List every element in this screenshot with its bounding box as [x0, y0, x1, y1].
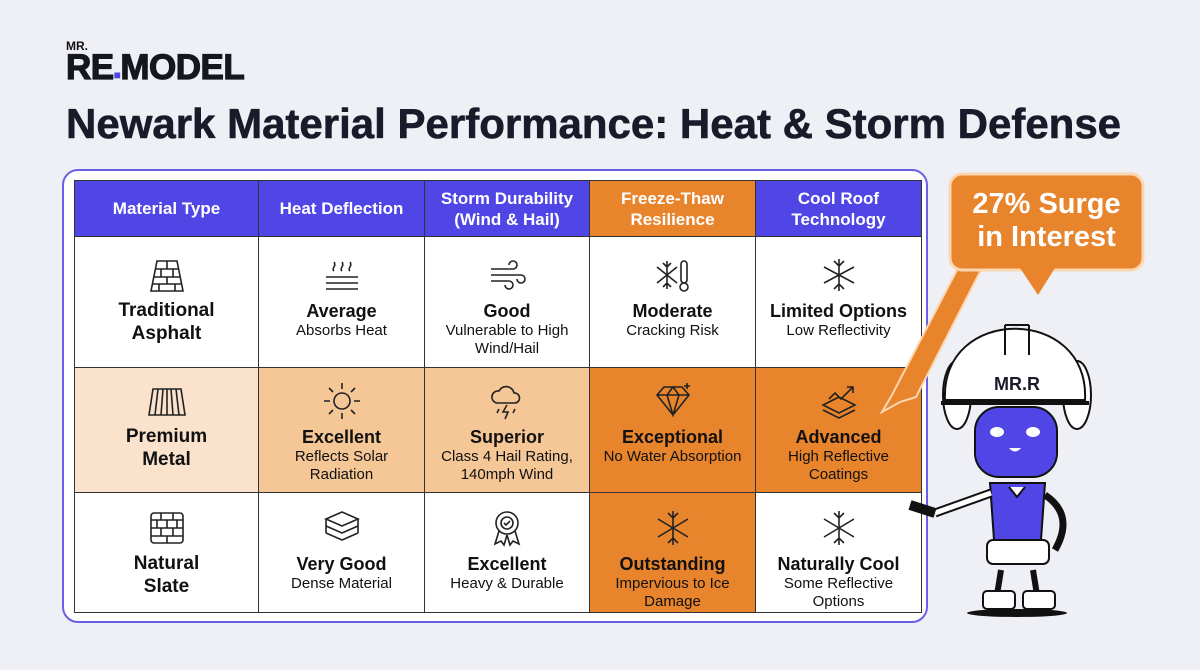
panel: comparison table: Reflects Solar: [295, 448, 388, 465]
panel: comparison table: Resilience: [630, 210, 715, 228]
panel: comparison table: Some Reflective: [784, 575, 893, 592]
panel: comparison table: No Water Absorption: [604, 448, 741, 465]
panel: comparison table: Damage: [644, 593, 701, 610]
title: Newark Material Performance: Heat & Storm Defense: [66, 100, 1121, 147]
panel: comparison table: Premium: [126, 426, 207, 447]
icon: robot mascot: [908, 324, 1092, 617]
callout: 27% surge: 27% Surge: [972, 188, 1121, 220]
panel: comparison table: Coatings: [809, 466, 868, 483]
panel: comparison table: Limited Options: [770, 301, 907, 321]
panel: comparison table: Excellent: [467, 554, 547, 574]
panel: comparison table: Freeze-Thaw: [621, 188, 724, 208]
panel: comparison table: Metal: [142, 449, 191, 470]
callout: 27% surge: in Interest: [977, 221, 1116, 253]
panel: comparison table: Average: [306, 301, 377, 321]
panel: comparison table: Technology: [791, 210, 886, 228]
panel: comparison table: High Reflective: [788, 448, 889, 465]
panel: comparison table: Impervious to Ice: [615, 575, 730, 592]
panel: comparison table: Class 4 Hail Rating,: [441, 448, 573, 465]
panel: comparison table: Good: [484, 301, 530, 321]
panel: comparison table: Heavy & Durable: [450, 575, 564, 592]
panel: comparison table: Natural: [134, 553, 199, 574]
icon: robot mascot: MR.R: [994, 374, 1040, 394]
panel: comparison table: Asphalt: [132, 323, 201, 344]
panel: comparison table: Wind/Hail: [475, 340, 539, 357]
panel: comparison table: Traditional: [118, 300, 215, 321]
logo: RE■MODEL: [66, 48, 244, 87]
panel: comparison table: Cool Roof: [798, 188, 879, 208]
panel: comparison table: Storm Durability: [441, 188, 573, 208]
panel: comparison table: 140mph Wind: [461, 466, 553, 483]
callout: 27% surge: [879, 172, 1144, 414]
panel: comparison table: Slate: [144, 576, 189, 597]
panel: comparison table: Heat Deflection: [280, 199, 403, 218]
panel: comparison table: Very Good: [296, 554, 387, 574]
panel: comparison table: Naturally Cool: [777, 554, 900, 574]
panel: comparison table: [62, 169, 928, 623]
panel: comparison table: Excellent: [302, 427, 381, 447]
panel: comparison table: Dense Material: [291, 575, 392, 592]
panel: comparison table: Moderate: [632, 301, 712, 321]
panel: comparison table: (Wind & Hail): [454, 210, 560, 228]
panel: comparison table: Advanced: [795, 427, 882, 447]
panel: comparison table: Outstanding: [620, 554, 726, 574]
panel: comparison table: Superior: [470, 427, 544, 447]
panel: comparison table: Vulnerable to High: [446, 322, 568, 339]
logo: MR.: [66, 39, 88, 53]
panel: comparison table: Absorbs Heat: [296, 322, 387, 339]
panel: comparison table: Low Reflectivity: [786, 322, 891, 339]
panel: comparison table: Cracking Risk: [626, 322, 719, 339]
panel: comparison table: Exceptional: [622, 427, 723, 447]
panel: comparison table: Material Type: [113, 199, 220, 218]
panel: comparison table: Options: [813, 593, 864, 610]
panel: comparison table: Radiation: [310, 466, 373, 483]
